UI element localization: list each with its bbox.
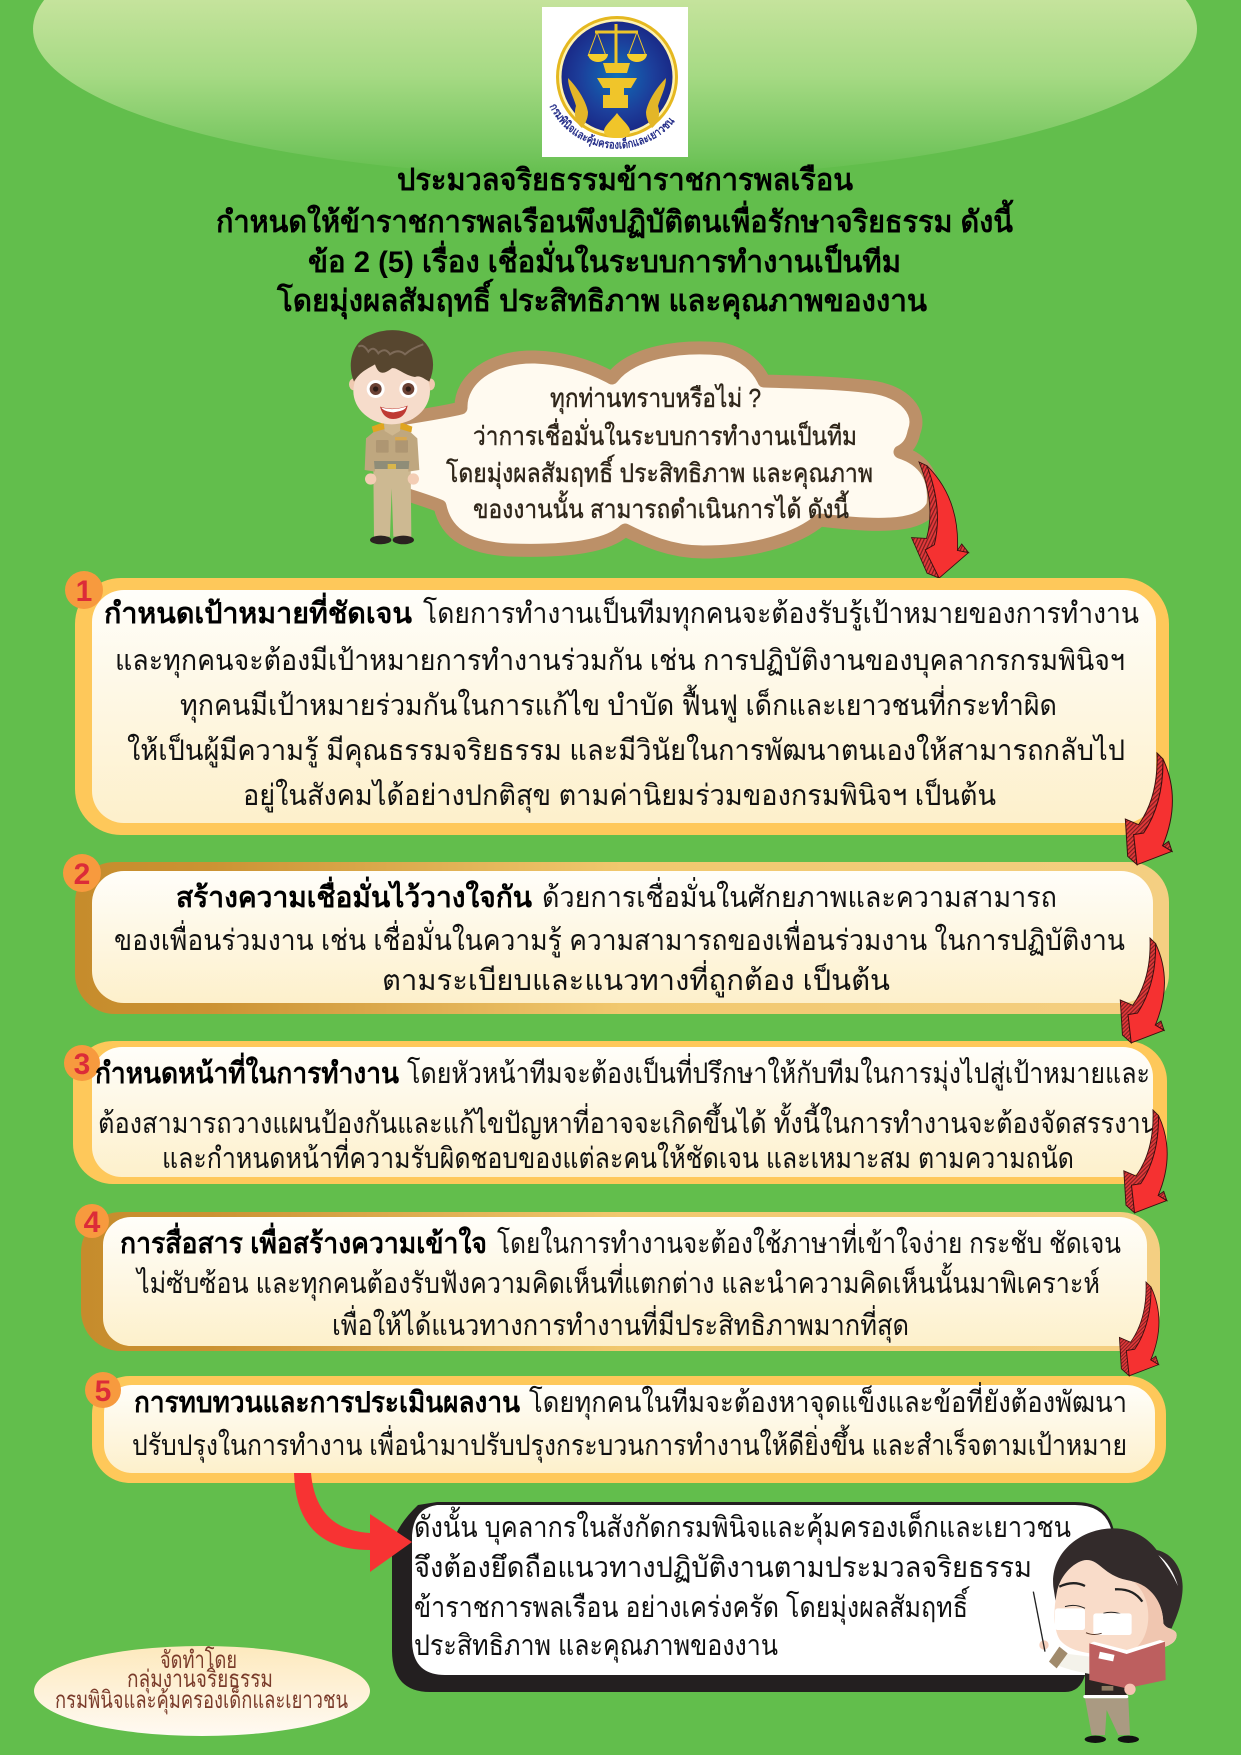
- badge 1: 1: [76, 575, 92, 608]
- arrow: panel 2 to panel 3: [1120, 938, 1164, 1043]
- logo: department seal: [542, 7, 688, 157]
- arrow: panel 3 to panel 4: [1124, 1110, 1167, 1213]
- panel 5 text: โดยทุกคนในทีมจะต้องหาจุดแข็งและข้อที่ยังต้องพัฒนา: [529, 1382, 1127, 1420]
- panel 4 text: ไม่ซับซ้อน และทุกคนต้องรับฟังความคิดเห็นที่แตกต่าง และนำความคิดเห็นนั้นมาพิเคราะห์: [135, 1262, 1100, 1301]
- title: กำหนดให้ข้าราชการพลเรือนพึงปฏิบัติตนเพื่อรักษาจริยธรรม ดังนี้: [216, 199, 1014, 239]
- badge 2: 2: [74, 858, 90, 891]
- panel 1 text: [104, 592, 1139, 813]
- panel 3: assign roles: [64, 1041, 1167, 1184]
- badge 4: [75, 1204, 109, 1239]
- panel 1 text: โดยการทำงานเป็นทีมทุกคนจะต้องรับรู้เป้าหมายของการทำงาน: [423, 595, 1139, 631]
- title: [216, 164, 1014, 320]
- badge 3: [64, 1045, 100, 1081]
- conclusion box: [392, 1502, 1115, 1692]
- character: boy in uniform: [349, 330, 435, 544]
- panel 1 text: อยู่ในสังคมได้อย่างปกติสุข ตามค่านิยมร่วมของกรมพินิจฯ เป็นต้น: [243, 777, 996, 813]
- panel 5: review and evaluation: [85, 1372, 1166, 1483]
- bubble text: [446, 383, 873, 524]
- arrow: panel 1 to panel 2: [1125, 753, 1172, 865]
- footer credit ellipse: กลุ่มงานจริยธรรม: [127, 1666, 273, 1694]
- panel 2 text: ด้วยการเชื่อมั่นในศักยภาพและความสามารถ: [542, 877, 1057, 914]
- panel 1: clear goals: [65, 571, 1169, 835]
- badge 5: 5: [95, 1375, 111, 1408]
- bubble text: ว่าการเชื่อมั่นในระบบการทำงานเป็นทีม: [473, 418, 857, 451]
- panel 2 text: สร้างความเชื่อมั่นไว้วางใจกัน: [176, 876, 532, 914]
- conclusion text: จึงต้องยึดถือแนวทางปฏิบัติงานตามประมวลจริยธรรม: [414, 1552, 1032, 1584]
- arrow: panel 5 to conclusion: [294, 1473, 412, 1572]
- badge 2: [63, 854, 101, 892]
- panel 4 text: [120, 1222, 1121, 1343]
- logo: department seal: กรมพินิจและคุ้มครองเด็กและเยาวชน: [550, 104, 675, 149]
- panel 1 text: และทุกคนจะต้องมีเป้าหมายการทำงานร่วมกัน เช่น การปฏิบัติงานของบุคลากรกรมพินิจฯ: [115, 645, 1125, 678]
- panel 2 text: [114, 876, 1125, 998]
- conclusion text: ดังนั้น บุคลากรในสังกัดกรมพินิจและคุ้มครองเด็กและเยาวชน: [414, 1506, 1071, 1545]
- panel 3 text: และกำหนดหน้าที่ความรับผิดชอบของแต่ละคนให้ชัดเจน และเหมาะสม ตามความถนัด: [162, 1138, 1074, 1175]
- footer credit ellipse: จัดทำโดย: [160, 1646, 237, 1674]
- title: ประมวลจริยธรรมข้าราชการพลเรือน: [397, 164, 853, 197]
- footer credit ellipse: กรมพินิจและคุ้มครองเด็กและเยาวชน: [55, 1685, 348, 1715]
- panel 4 text: การสื่อสาร เพื่อสร้างความเข้าใจ: [120, 1222, 487, 1260]
- badge 3: 3: [74, 1048, 90, 1081]
- panel 2: mutual trust: [63, 854, 1169, 1014]
- panel 5 text: [132, 1382, 1127, 1463]
- title: ข้อ 2 (5) เรื่อง เชื่อมั่นในระบบการทำงานเป็นทีม: [308, 240, 901, 279]
- title: โดยมุ่งผลสัมฤทธิ์ ประสิทธิภาพ และคุณภาพของงาน: [276, 278, 927, 320]
- header ellipse: [33, 0, 1197, 178]
- panel 4: communication: [75, 1204, 1160, 1351]
- speech bubble: [400, 348, 933, 552]
- bubble text: ของงานนั้น สามารถดำเนินการได้ ดังนี้: [473, 490, 849, 524]
- badge 4: 4: [84, 1206, 101, 1239]
- panel 3 text: [95, 1052, 1158, 1175]
- badge 5: [85, 1372, 121, 1408]
- panel 2 text: ของเพื่อนร่วมงาน เช่น เชื่อมั่นในความรู้ ความสามารถของเพื่อนร่วมงาน ในการปฏิบัติงาน: [114, 920, 1125, 958]
- conclusion text: ข้าราชการพลเรือน อย่างเคร่งครัด โดยมุ่งผลสัมฤทธิ์: [414, 1586, 970, 1625]
- panel 1 text: ทุกคนมีเป้าหมายร่วมกันในการแก้ไข บำบัด ฟื้นฟู เด็กและเยาวชนที่กระทำผิด: [180, 684, 1057, 723]
- arrow: bubble to panel 1: [888, 457, 974, 582]
- bubble text: โดยมุ่งผลสัมฤทธิ์ ประสิทธิภาพ และคุณภาพ: [446, 454, 873, 489]
- panel 4 text: เพื่อให้ได้แนวทางการทำงานที่มีประสิทธิภาพมากที่สุด: [332, 1305, 909, 1343]
- panel 5 text: การทบทวนและการประเมินผลงาน: [134, 1387, 520, 1419]
- conclusion text: ประสิทธิภาพ และคุณภาพของงาน: [414, 1630, 778, 1663]
- badge 1: [65, 571, 103, 609]
- character: teacher with book and pointer: [1033, 1528, 1183, 1743]
- panel 1 text: กำหนดเป้าหมายที่ชัดเจน: [104, 592, 412, 630]
- panel 1 text: ให้เป็นผู้มีความรู้ มีคุณธรรมจริยธรรม และมีวินัยในการพัฒนาตนเองให้สามารถกลับไป: [127, 732, 1125, 768]
- conclusion text: [414, 1506, 1071, 1663]
- arrow: panel 4 to panel 5: [1119, 1282, 1159, 1376]
- panel 3 text: กำหนดหน้าที่ในการทำงาน: [95, 1052, 399, 1090]
- panel 4 text: โดยในการทำงานจะต้องใช้ภาษาที่เข้าใจง่าย กระชับ ชัดเจน: [497, 1223, 1121, 1260]
- bubble text: ทุกท่านทราบหรือไม่ ?: [550, 383, 761, 414]
- footer credit ellipse: [34, 1646, 370, 1736]
- panel 2 text: ตามระเบียบและแนวทางที่ถูกต้อง เป็นต้น: [382, 960, 890, 998]
